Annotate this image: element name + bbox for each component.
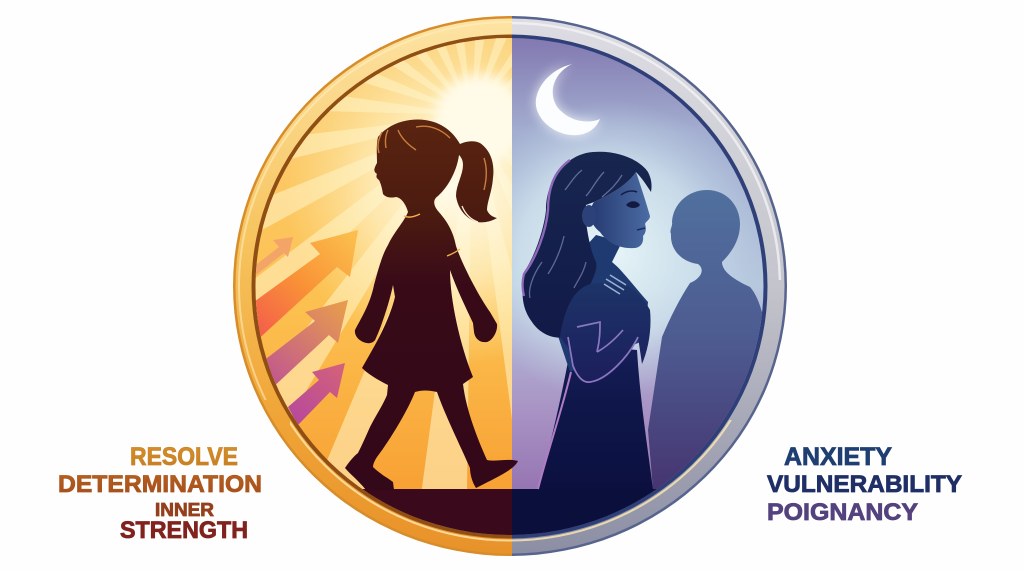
eyebrow [621, 191, 637, 195]
label: vulnerability: VULNERABILITY [767, 471, 962, 498]
medallion [222, 0, 787, 556]
shadow figure [648, 190, 770, 500]
moon [536, 64, 600, 135]
ring: gold left half [233, 16, 512, 556]
arrow: large orange [256, 230, 358, 337]
sun [434, 74, 526, 166]
ground: warm [362, 489, 512, 535]
label: inner: INNER [155, 500, 214, 520]
text: right keywords [767, 443, 962, 526]
hair highlights [378, 126, 486, 190]
scene: sunny left half [256, 38, 512, 535]
arm and hand [560, 283, 651, 382]
neck and chest [556, 235, 648, 372]
arm outline [568, 322, 638, 382]
label: strength: STRENGTH [120, 517, 248, 544]
arrow: small top [252, 237, 293, 275]
arrow: small bottom [288, 363, 345, 425]
hair [522, 152, 652, 338]
ring highlight: lower [290, 420, 732, 542]
label: anxiety: ANXIETY [784, 443, 892, 471]
ponytail highlight [462, 206, 478, 222]
fingers [604, 275, 626, 294]
walking girl silhouette [345, 120, 518, 490]
scene: moonlit right half [512, 30, 772, 549]
hair rim light [522, 160, 570, 296]
label: resolve: RESOLVE [130, 443, 238, 471]
eye [626, 201, 640, 208]
ear [582, 205, 594, 227]
label: poignancy: POIGNANCY [767, 499, 918, 526]
ring highlight: gold [238, 21, 512, 400]
face [590, 172, 650, 248]
dress [538, 345, 653, 489]
text: left keywords [58, 443, 262, 544]
sun rays [256, 38, 512, 532]
label: determination: DETERMINATION [58, 471, 262, 498]
mouth [637, 228, 645, 230]
arrow: middle [266, 300, 348, 384]
scene: inner disc [256, 38, 764, 535]
collar and sleeve [404, 214, 460, 256]
ring highlight: silver [512, 22, 782, 280]
sad girl [522, 152, 653, 489]
ground: cool [512, 489, 656, 535]
hair strands [530, 170, 622, 298]
ring: silver right half [512, 16, 787, 556]
